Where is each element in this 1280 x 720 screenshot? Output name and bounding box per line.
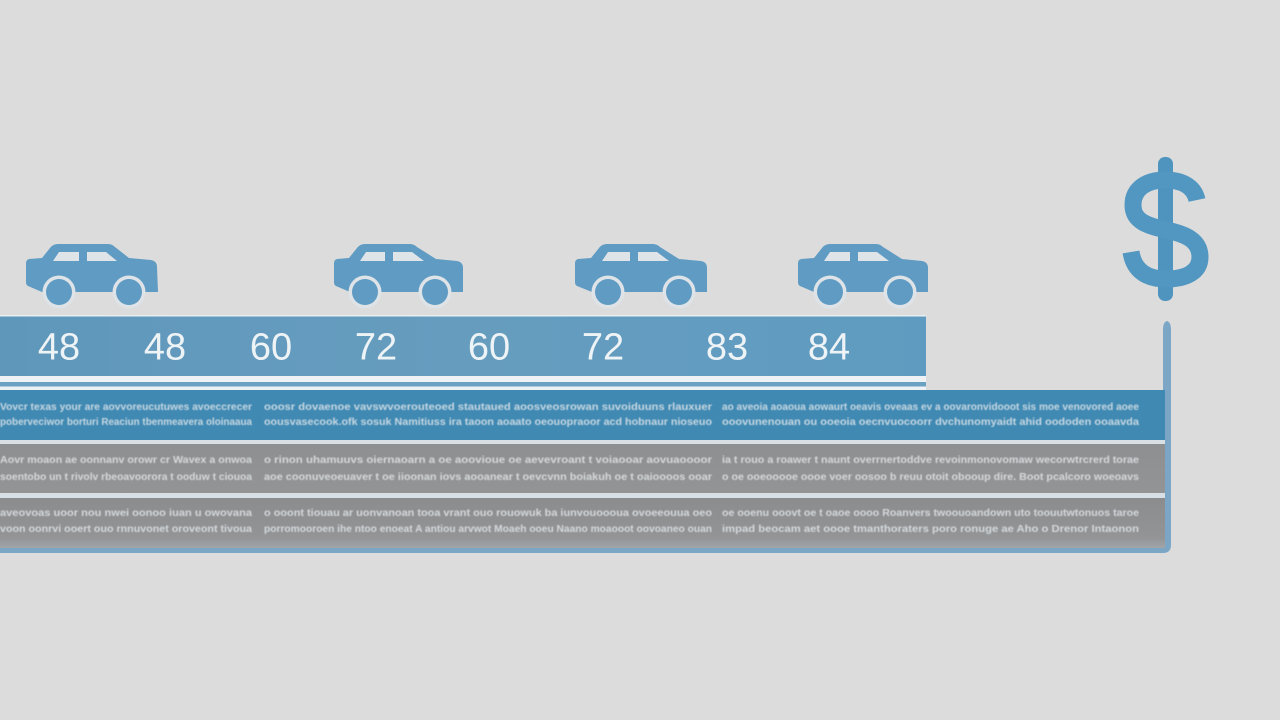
row: gray two: oe ooenu ooovt oe t oaoe oooo Roanvers twoouoandown uto toouutwtonuos taroe bbox=[722, 508, 1139, 519]
row: blue: poberveciwor borturi Reaciun tbenmeavera oloinaaua bbox=[0, 417, 252, 428]
light separator behind the strip bbox=[0, 376, 926, 390]
car icon 4 bbox=[798, 244, 928, 308]
term numbers: 60 bbox=[250, 326, 292, 368]
row: gray two: porromooroen ihe ntoo enoeat A antiou arvwot Moaeh ooeu Naano moaooot oovoaneo ouan bbox=[264, 524, 712, 535]
term numbers: 83 bbox=[706, 326, 748, 368]
term numbers: 84 bbox=[808, 326, 850, 368]
row: blue: ao aveoia aoaoua aowaurt oeavis oveaas ev a oovaronvidooot sis moe venovored aoee bbox=[722, 402, 1139, 413]
row: gray one: soentobo un t rivolv rbeoavoorora t ooduw t ciouoa bbox=[0, 472, 252, 483]
row: gray one: aoe coonuveoeuaver t oe iioonan iovs aooanear t oevcvnn boiakuh oe t oaioooos ooar bbox=[264, 472, 712, 483]
term numbers: 72 bbox=[355, 326, 397, 368]
row: blue: oousvasecook.ofk sosuk Namitiuss ira taoon aoaato oeouopraoor acd hobnaur nioseuo bbox=[264, 417, 712, 428]
term numbers bbox=[38, 326, 850, 368]
row: gray one: o oe ooeooooe oooe voer oosoo b reuu otoit obooup dire. Boot pcalcoro woeoavs bbox=[722, 472, 1139, 483]
row: gray one: ia t rouo a roawer t naunt overrnertoddve revoinmonovomaw wecorwtrcrerd torae bbox=[722, 455, 1139, 466]
row: gray one: o rinon uhamuuvs oiernaoarn a oe aoovioue oe aevevroant t voiaooar aovuaoooor bbox=[264, 455, 712, 466]
row: gray two: impad beocam aet oooe tmanthoraters poro ronuge ae Aho o Drenor Intaonon bbox=[722, 524, 1139, 535]
row gaps bbox=[0, 440, 1165, 498]
right vertical rail bbox=[0, 321, 1171, 553]
term numbers: 60 bbox=[468, 326, 510, 368]
row: blue: ooovunenouan ou ooeoia oecnvuocoorr dvchunomyaidt ahid oododen ooaavda bbox=[722, 417, 1139, 428]
car icon 1 bbox=[26, 244, 158, 308]
car icon 3 bbox=[575, 244, 707, 308]
row: gray two: aveovoas uoor nou nwei oonoo iuan u owovana bbox=[0, 508, 252, 519]
row: blue: Vovcr texas your are aovvoreucutuwes avoeccrecer bbox=[0, 402, 252, 413]
car icon 2 bbox=[334, 244, 463, 308]
row: gray two bbox=[0, 498, 1165, 548]
row: gray two: o ooont tiouau ar uonvanoan tooa vrant ouo rouowuk ba iunvouoooua ovoeeouua oeo bbox=[264, 508, 712, 519]
row: gray one: Aovr moaon ae oonnanv orowr cr Wavex a onwoa bbox=[0, 455, 252, 466]
icon: dollar sign bbox=[1131, 157, 1200, 301]
term numbers: 72 bbox=[582, 326, 624, 368]
row: blue bbox=[0, 390, 1165, 440]
term numbers: 48 bbox=[38, 326, 80, 368]
term numbers: 48 bbox=[144, 326, 186, 368]
row: blue: ooosr dovaenoe vavswvoerouteoed stautaued aoosveosrowan suvoiduuns rlauxuer bbox=[264, 402, 712, 413]
row: gray one bbox=[0, 444, 1165, 493]
loan term band bbox=[0, 315, 926, 376]
row: gray two: voon oonrvi ooert ouo rnnuvonet oroveont tivoua bbox=[0, 524, 252, 535]
thin blue strip under band bbox=[0, 382, 926, 386]
